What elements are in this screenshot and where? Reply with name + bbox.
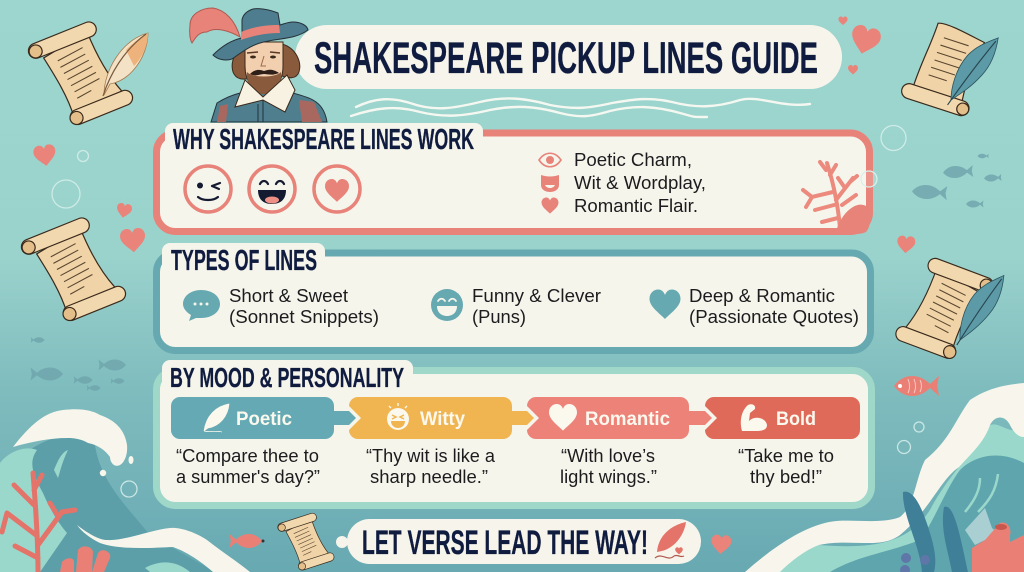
icon: theatre mask	[541, 175, 559, 192]
quote: romantic: light wings.”	[560, 467, 657, 487]
heading: types: TYPES OF LINES	[171, 245, 317, 277]
icon: heart	[650, 290, 680, 319]
icon: speech bubble	[183, 290, 220, 321]
quote: poetic	[176, 446, 320, 487]
seaweed and sponge: bottom right	[900, 492, 1024, 572]
item: deep and romantic	[689, 286, 859, 327]
text: reasons list: Romantic Flair.	[574, 196, 698, 216]
closing text: LET VERSE LEAD THE WAY!	[362, 524, 648, 562]
button: poetic	[171, 397, 334, 439]
title banner	[295, 25, 842, 89]
coral fish: right	[894, 376, 939, 396]
scroll: middle left	[19, 213, 128, 328]
quote: witty	[366, 446, 496, 487]
quote: witty: sharp needle.”	[370, 467, 488, 487]
item: funny and clever	[472, 286, 601, 327]
icon: heart	[542, 198, 558, 214]
item: short and sweet: Short & Sweet	[229, 286, 348, 306]
ocean wave: left	[0, 409, 250, 572]
connector arrows	[332, 406, 717, 430]
icon: smiling face	[431, 289, 463, 321]
heading: mood: BY MOOD & PERSONALITY	[170, 362, 404, 393]
quote: romantic: “With love’s	[561, 446, 655, 466]
item: short and sweet	[229, 286, 379, 327]
button: romantic	[527, 397, 689, 439]
quote: witty: “Thy wit is like a	[366, 446, 496, 466]
scroll and quill: top left	[26, 17, 148, 132]
panel: by mood and personality	[156, 360, 872, 506]
scroll and quill: middle right	[894, 254, 1011, 365]
small scroll: bottom	[277, 511, 335, 572]
bubble: over panel edge	[861, 171, 877, 187]
button: romantic: Romantic	[585, 409, 670, 430]
button: witty: Witty	[420, 409, 465, 430]
quote: romantic	[560, 446, 657, 487]
quote: bold	[738, 446, 834, 487]
button: bold	[705, 397, 860, 439]
coral decoration	[803, 162, 870, 234]
decorative waves under title	[351, 98, 810, 117]
item: deep and romantic: Deep & Romantic	[689, 286, 835, 306]
coral: bottom left	[2, 473, 75, 572]
closing banner	[336, 519, 701, 564]
text: reasons list: Wit & Wordplay,	[574, 173, 706, 193]
button: bold: Bold	[776, 409, 816, 430]
ocean wave: right	[745, 383, 1024, 572]
heading tab: types	[162, 243, 325, 273]
sponge: bottom left	[60, 546, 110, 572]
icon: winking face	[185, 166, 231, 212]
icon: eye	[539, 153, 561, 167]
icon: heart circle	[314, 166, 360, 212]
button: poetic: Poetic	[236, 409, 292, 430]
quote: bold: thy bed!”	[750, 467, 822, 487]
item: funny and clever: Funny & Clever	[472, 286, 601, 306]
heading tab: why	[165, 123, 483, 153]
scroll and quill: top right	[900, 18, 1005, 118]
icon: quill and heart	[655, 522, 686, 558]
button: witty	[349, 397, 512, 439]
quote: poetic: “Compare thee to	[176, 446, 319, 466]
item: deep and romantic: (Passionate Quotes)	[689, 307, 859, 327]
text: reasons list	[574, 150, 706, 216]
item: funny and clever: (Puns)	[472, 307, 526, 327]
text: reasons list: Poetic Charm,	[574, 150, 692, 170]
item: short and sweet: (Sonnet Snippets)	[229, 307, 379, 327]
heading: why: WHY SHAKESPEARE LINES WORK	[173, 124, 474, 156]
coral fish: bottom	[230, 534, 264, 548]
bubbles	[52, 126, 924, 497]
quote: bold: “Take me to	[738, 446, 834, 466]
icon: laughing face	[249, 166, 295, 212]
heading tab: mood	[162, 360, 413, 390]
Shakespeare portrait	[190, 8, 327, 122]
quote: poetic: a summer's day?”	[176, 467, 320, 487]
panel: why Shakespeare lines work	[156, 123, 870, 234]
panel: types of lines	[156, 243, 870, 350]
fish silhouettes	[30, 154, 1002, 391]
